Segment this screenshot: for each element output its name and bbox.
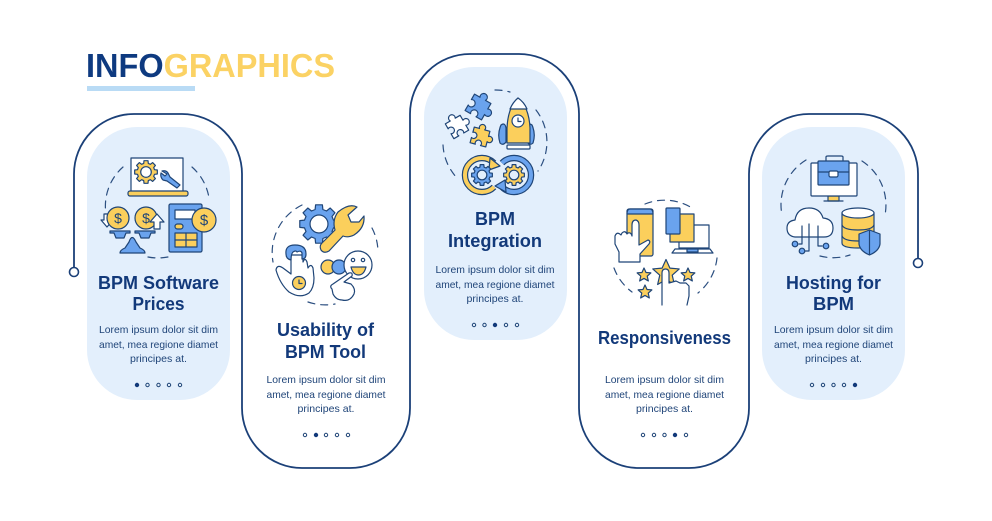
text block (774, 324, 893, 365)
icon: prices, laptop, scale and calculator: $ (114, 210, 122, 226)
heading (448, 209, 542, 251)
heading: BPM Software (98, 273, 219, 293)
text block: amet, mea regione diamet (266, 389, 386, 401)
icon: puzzle, rocket and cycle (443, 89, 547, 192)
heading: Usability of (277, 320, 375, 340)
text block: Lorem ipsum dolor sit dim (266, 374, 386, 386)
page dots (810, 383, 857, 387)
page dots (641, 433, 688, 437)
text block: principes at. (298, 403, 354, 415)
text block: principes at. (805, 353, 862, 365)
title: INFOGRAPHICS (86, 47, 335, 84)
text block (266, 374, 386, 415)
heading: Responsiveness (598, 328, 731, 348)
text block: amet, mea regione diamet (605, 389, 724, 401)
icon: devices, hands and stars (614, 200, 717, 305)
icon: prices, laptop, scale and calculator: $ (200, 212, 209, 229)
text block: Lorem ipsum dolor sit dim (99, 324, 218, 336)
text block: principes at. (466, 293, 524, 305)
text block: amet, mea regione diamet (99, 339, 218, 351)
heading: Prices (132, 294, 184, 314)
text block (605, 374, 724, 415)
text block: amet, mea regione diamet (774, 339, 893, 351)
text block: Lorem ipsum dolor sit dim (436, 264, 555, 276)
heading: BPM Tool (285, 342, 366, 362)
icon: prices, laptop, scale and calculator (101, 158, 216, 258)
text block: principes at. (636, 403, 693, 415)
panel: Usability of BPM Tool (242, 175, 410, 468)
page dots (135, 383, 182, 387)
text block: principes at. (130, 353, 187, 365)
icon: gear, wrench, hands and emoji (272, 205, 378, 305)
heading: Hosting for (786, 273, 881, 293)
panel: Hosting for BPM (762, 127, 905, 400)
icon: prices, laptop, scale and calculator: $ (142, 210, 150, 226)
page dots (472, 323, 519, 327)
heading: Integration (448, 231, 542, 251)
text block: Lorem ipsum dolor sit dim (774, 324, 893, 336)
heading (786, 273, 881, 314)
text block: Lorem ipsum dolor sit dim (605, 374, 724, 386)
heading: BPM (475, 209, 515, 229)
text block (436, 264, 555, 305)
icon: monitor, cloud and database (781, 156, 886, 258)
page dots (303, 433, 350, 437)
panel: Responsiveness (580, 175, 749, 468)
panel: BPM Integration (424, 67, 567, 340)
connector line (70, 54, 922, 468)
heading (277, 320, 375, 362)
heading (98, 273, 219, 314)
text block (99, 324, 218, 365)
heading: BPM (813, 294, 854, 314)
panel: BPM Software Prices (87, 127, 230, 400)
text block: amet, mea regione diamet (436, 279, 555, 291)
